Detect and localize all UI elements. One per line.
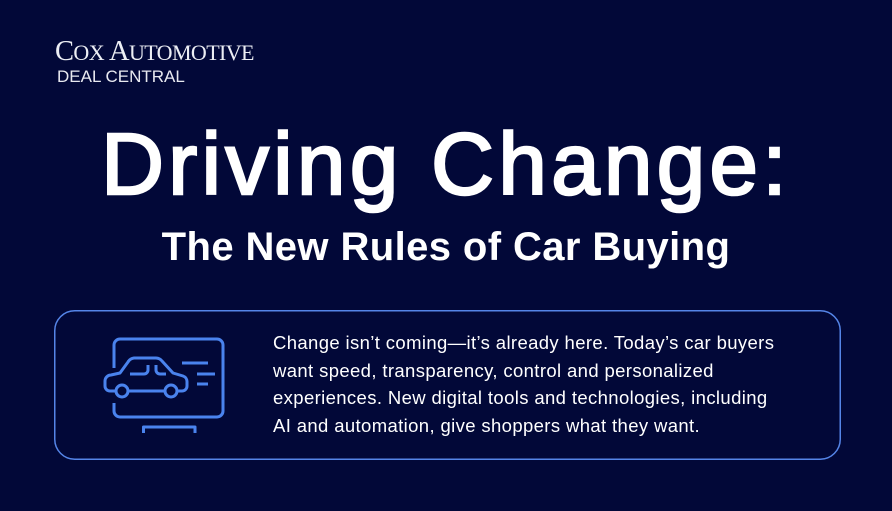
panel: intro callout	[54, 310, 841, 460]
logo subtitle: DEAL CENTRAL	[57, 67, 185, 86]
intro text: Change isn’t coming—it’s already here. Today’s car buyers	[273, 332, 774, 353]
logo: Cox Automotive Deal Central	[55, 36, 254, 86]
intro text: experiences. New digital tools and technologies, including	[273, 387, 768, 408]
intro text	[273, 332, 774, 436]
title: Driving Change:	[101, 116, 791, 213]
logo wordmark: COX AUTOMOTIVE	[55, 36, 254, 67]
intro text: AI and automation, give shoppers what they want.	[273, 414, 700, 436]
subtitle: The New Rules of Car Buying	[162, 225, 730, 269]
icon: car on screen	[104, 338, 224, 433]
intro text: want speed, transparency, control and personalized	[273, 360, 714, 380]
